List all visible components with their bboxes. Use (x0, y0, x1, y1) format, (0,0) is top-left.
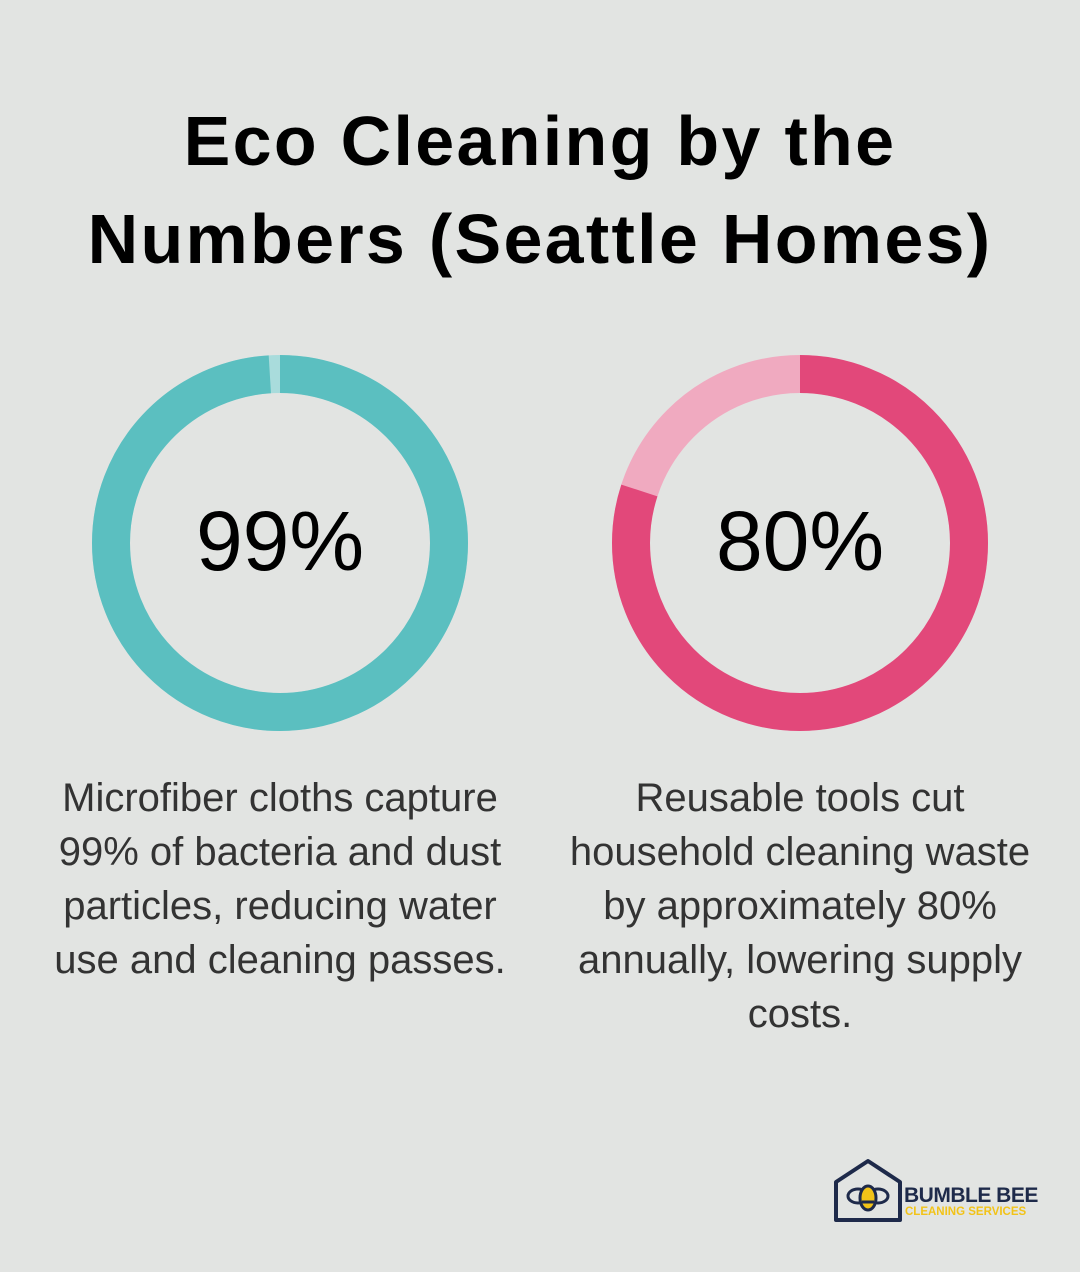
donut: 80%: 80% (716, 494, 884, 588)
logo: BUMBLE BEE (904, 1184, 1038, 1207)
logo (834, 1159, 1038, 1222)
donut: 80% (612, 355, 988, 731)
title: Eco Cleaning by the (184, 102, 896, 180)
title: Numbers (Seattle Homes) (88, 200, 992, 278)
title (88, 102, 992, 278)
donut: 99%: 99% (196, 494, 364, 588)
text: microfiber: Microfiber cloths capture 99% of bacteria and dust particles, reducing water use and cleaning passes. (54, 776, 506, 982)
donut: 99% (92, 355, 468, 731)
logo: CLEANING SERVICES (905, 1206, 1026, 1218)
text: reusable: Reusable tools cut household cleaning waste by approximately 80% annually, lowering supply costs. (570, 776, 1030, 1036)
